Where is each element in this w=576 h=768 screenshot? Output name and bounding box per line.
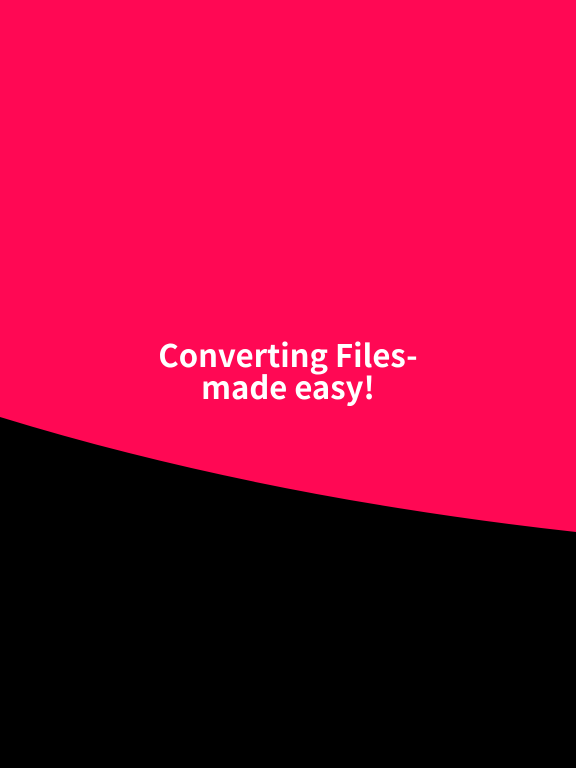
title: made easy! bbox=[201, 363, 375, 408]
title bbox=[158, 331, 418, 408]
title: Converting Files- bbox=[158, 331, 418, 376]
